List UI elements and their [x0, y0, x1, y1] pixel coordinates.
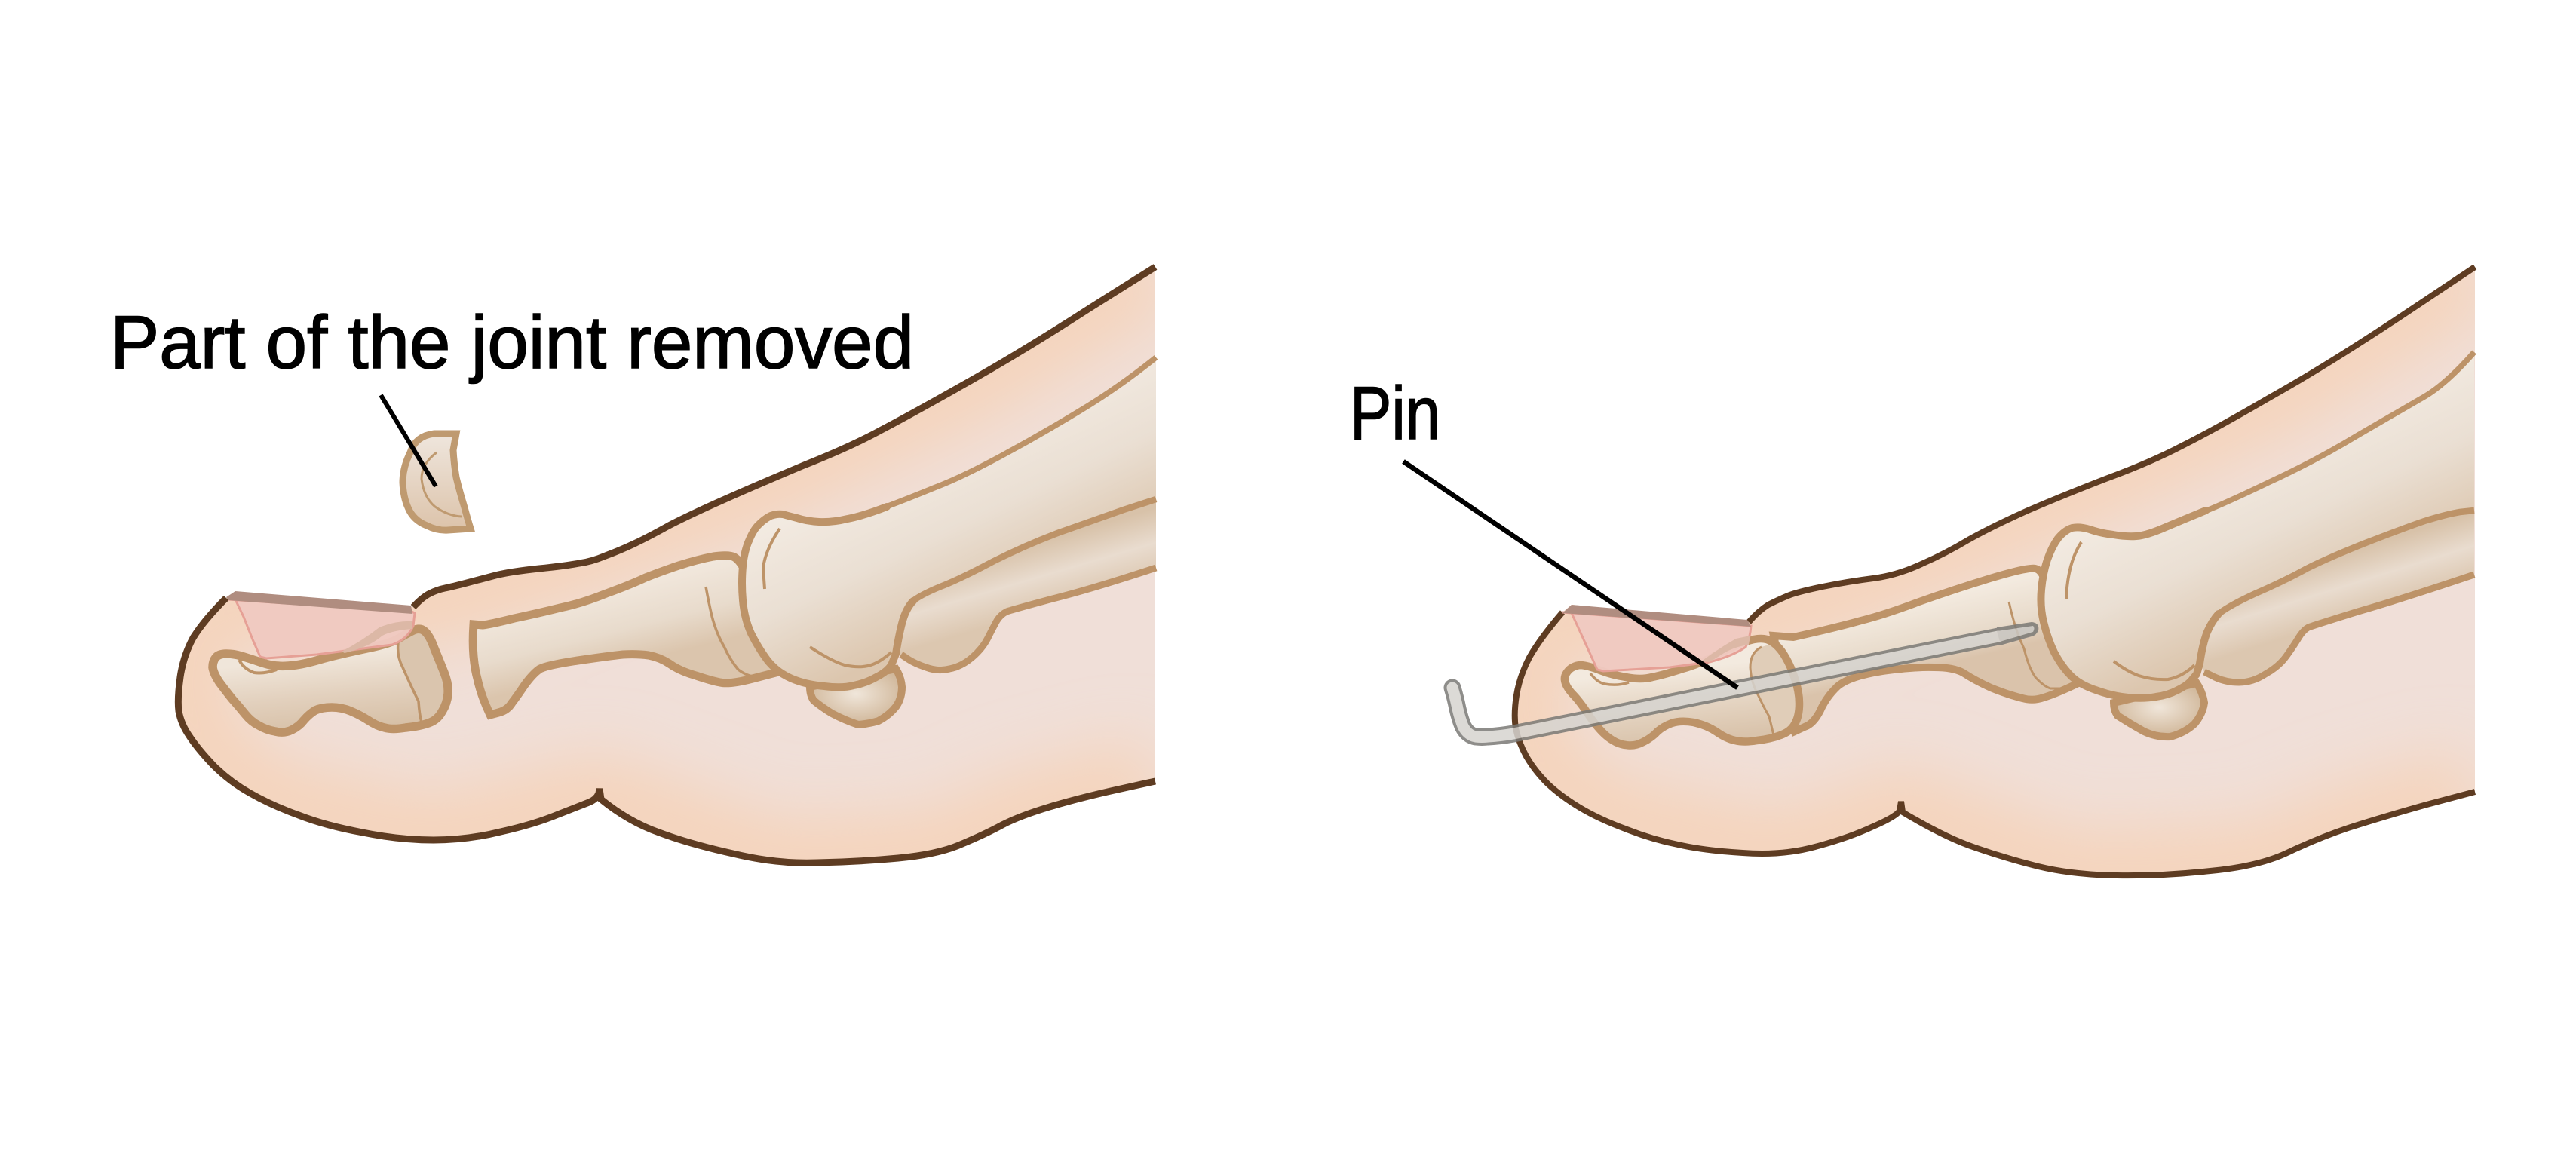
skin: left foot: [178, 267, 1155, 864]
bone: sesamoid: [810, 669, 902, 725]
panel: toe held with a pin: [1350, 267, 2475, 875]
skin: right foot: [1515, 267, 2475, 875]
removed piece of the joint: [403, 434, 471, 530]
label: part of the joint removed: Part of the joint removed: [110, 300, 914, 384]
bone: distal phalanx: [213, 627, 449, 732]
bone: proximal phalanx: [473, 556, 776, 715]
bone: fused distal phalanx: [1565, 639, 1799, 745]
leader line to removed piece: [381, 395, 436, 486]
illustration: two side views of a big toe: [115, 264, 2476, 879]
bone: second metatarsal: [2200, 511, 2474, 682]
toenail: [1562, 605, 1751, 671]
pin: [1452, 622, 2038, 737]
bone: sesamoid: [2114, 683, 2204, 737]
label: pin: Pin: [1350, 371, 1440, 455]
bone: first metatarsal head and shaft: [2041, 352, 2474, 698]
bone: second metatarsal: [896, 499, 1156, 670]
bone: proximal phalanx: [1774, 569, 2080, 731]
toenail: [226, 591, 415, 658]
bone: first metatarsal head and shaft: [742, 357, 1156, 687]
leader line to pin: [1403, 461, 1737, 688]
panel: toe with part of the joint removed: [110, 267, 1156, 864]
